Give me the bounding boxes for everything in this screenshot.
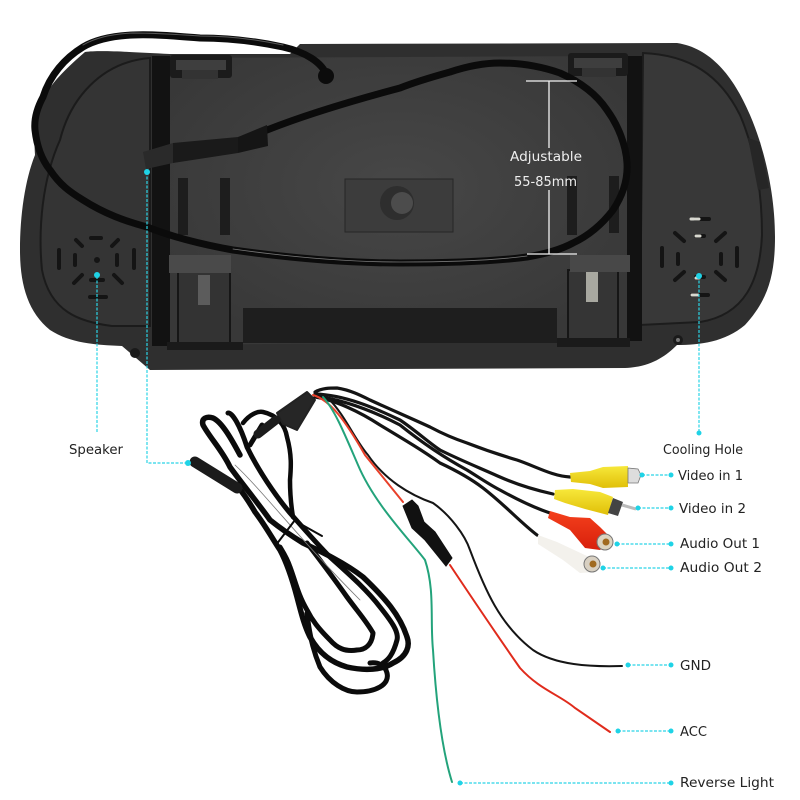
top left clip	[170, 55, 232, 79]
panel: right speaker area	[640, 53, 762, 325]
callout: audio out 1	[614, 537, 760, 552]
bottom left bracket	[167, 255, 243, 350]
plug: audio out 1	[548, 511, 613, 550]
wire: video 2	[315, 394, 553, 494]
callout: cooling hole	[663, 273, 743, 458]
panel: center plate	[170, 56, 627, 345]
panel: mirror back housing	[20, 43, 775, 370]
top right clip	[568, 53, 628, 77]
callout: speaker: Speaker	[69, 443, 124, 458]
mounting slots	[178, 176, 619, 235]
cable hole	[318, 68, 334, 84]
callout: reverse light: Reverse Light	[680, 776, 774, 791]
callout: video in 1	[640, 469, 743, 484]
wire: ACC	[313, 395, 403, 502]
screws	[130, 335, 683, 358]
callout: speaker	[69, 272, 124, 458]
callout: audio out 2	[600, 561, 762, 576]
left speaker holes	[59, 238, 134, 297]
plug: audio out 2	[538, 535, 600, 573]
side button	[748, 138, 769, 190]
inline fuse holder	[403, 500, 452, 566]
callout: audio out 2: Audio Out 2	[680, 561, 762, 576]
callout: cooling hole: Cooling Hole	[663, 443, 743, 458]
plug: video in 2	[554, 489, 636, 516]
rear connector	[195, 462, 237, 488]
center plate recess	[345, 179, 453, 232]
callout: GND	[626, 659, 711, 674]
small strain relief	[258, 420, 276, 434]
callout: video in 2	[636, 502, 746, 517]
wire: GND	[328, 398, 622, 666]
callout: ACC	[616, 725, 707, 740]
main cable on mirror	[35, 33, 627, 263]
dimension: adjustable 55-85mm: 55-85mm	[514, 175, 577, 190]
callout: reverse light	[458, 776, 774, 791]
wire: audio 1	[315, 396, 550, 513]
wire: audio 2	[315, 397, 537, 535]
dimension: adjustable 55-85mm: Adjustable	[510, 150, 582, 165]
callout: video in 2: Video in 2	[679, 502, 746, 517]
knob	[380, 186, 414, 220]
callout: GND: GND	[680, 659, 711, 674]
wire: reverse light	[323, 397, 452, 782]
callout: audio out 1: Audio Out 1	[680, 537, 760, 552]
callout: rear connector leader	[144, 169, 191, 466]
panel: left speaker area	[41, 58, 150, 326]
plug: video in 1	[570, 466, 641, 488]
dark vertical rails	[152, 56, 642, 346]
wire: video 1	[315, 388, 570, 477]
dimension: adjustable 55-85mm	[510, 81, 582, 254]
molded junction	[277, 392, 315, 430]
coiled extension cable	[195, 392, 408, 692]
callout: video in 1: Video in 1	[678, 469, 743, 484]
callout: ACC: ACC	[680, 725, 707, 740]
harness wires	[313, 388, 622, 782]
RCA plugs	[538, 466, 641, 573]
cable tie	[276, 520, 322, 545]
right speaker holes	[662, 219, 737, 295]
bottom slot	[243, 308, 557, 343]
cable connector	[143, 125, 268, 169]
bottom right bracket	[557, 255, 630, 347]
